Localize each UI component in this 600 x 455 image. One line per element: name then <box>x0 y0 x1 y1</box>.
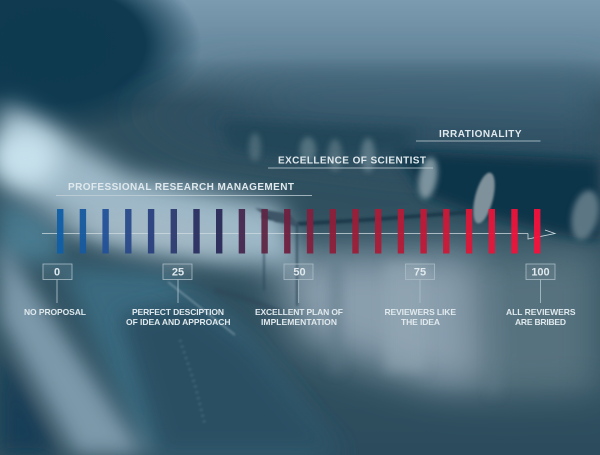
marker 0: no proposal: 0 <box>54 266 60 278</box>
scale bars <box>57 209 540 254</box>
marker 100: all reviewers are bribed: 100 <box>531 266 550 278</box>
marker 50: excellent plan: 50 <box>293 266 306 278</box>
heading: professional research management: PROFESSIONAL RESEARCH MANAGEMENT <box>68 182 294 193</box>
marker 50: excellent plan <box>255 264 343 327</box>
marker 25: perfect description <box>126 264 230 327</box>
marker 50: excellent plan: IMPLEMENTATION <box>261 317 337 327</box>
marker 50: excellent plan: EXCELLENT PLAN OF <box>255 307 343 317</box>
marker 25: perfect description: 25 <box>172 266 184 278</box>
marker 75: reviewers like the idea: THE IDEA <box>401 317 440 327</box>
marker 75: reviewers like the idea <box>384 264 456 327</box>
heading: irrationality <box>416 129 540 141</box>
heading: excellence of scientist: EXCELLENCE OF SCIENTIST <box>278 156 426 166</box>
marker 75: reviewers like the idea: 75 <box>414 266 426 278</box>
piano hammer tip <box>469 171 499 225</box>
marker 100: all reviewers are bribed: ARE BRIBED <box>515 317 566 327</box>
scale axis arrow <box>42 230 555 239</box>
marker 100: all reviewers are bribed: ALL REVIEWERS <box>506 307 576 317</box>
marker 25: perfect description: PERFECT DESCIPTION <box>132 307 224 317</box>
marker 0: no proposal: NO PROPOSAL <box>24 307 86 317</box>
marker 25: perfect description: OF IDEA AND APPROACH <box>126 317 230 327</box>
heading: irrationality: IRRATIONALITY <box>439 129 522 140</box>
marker 75: reviewers like the idea: REVIEWERS LIKE <box>384 307 456 317</box>
marker 0: no proposal <box>24 264 86 317</box>
marker 100: all reviewers are bribed <box>506 264 576 327</box>
